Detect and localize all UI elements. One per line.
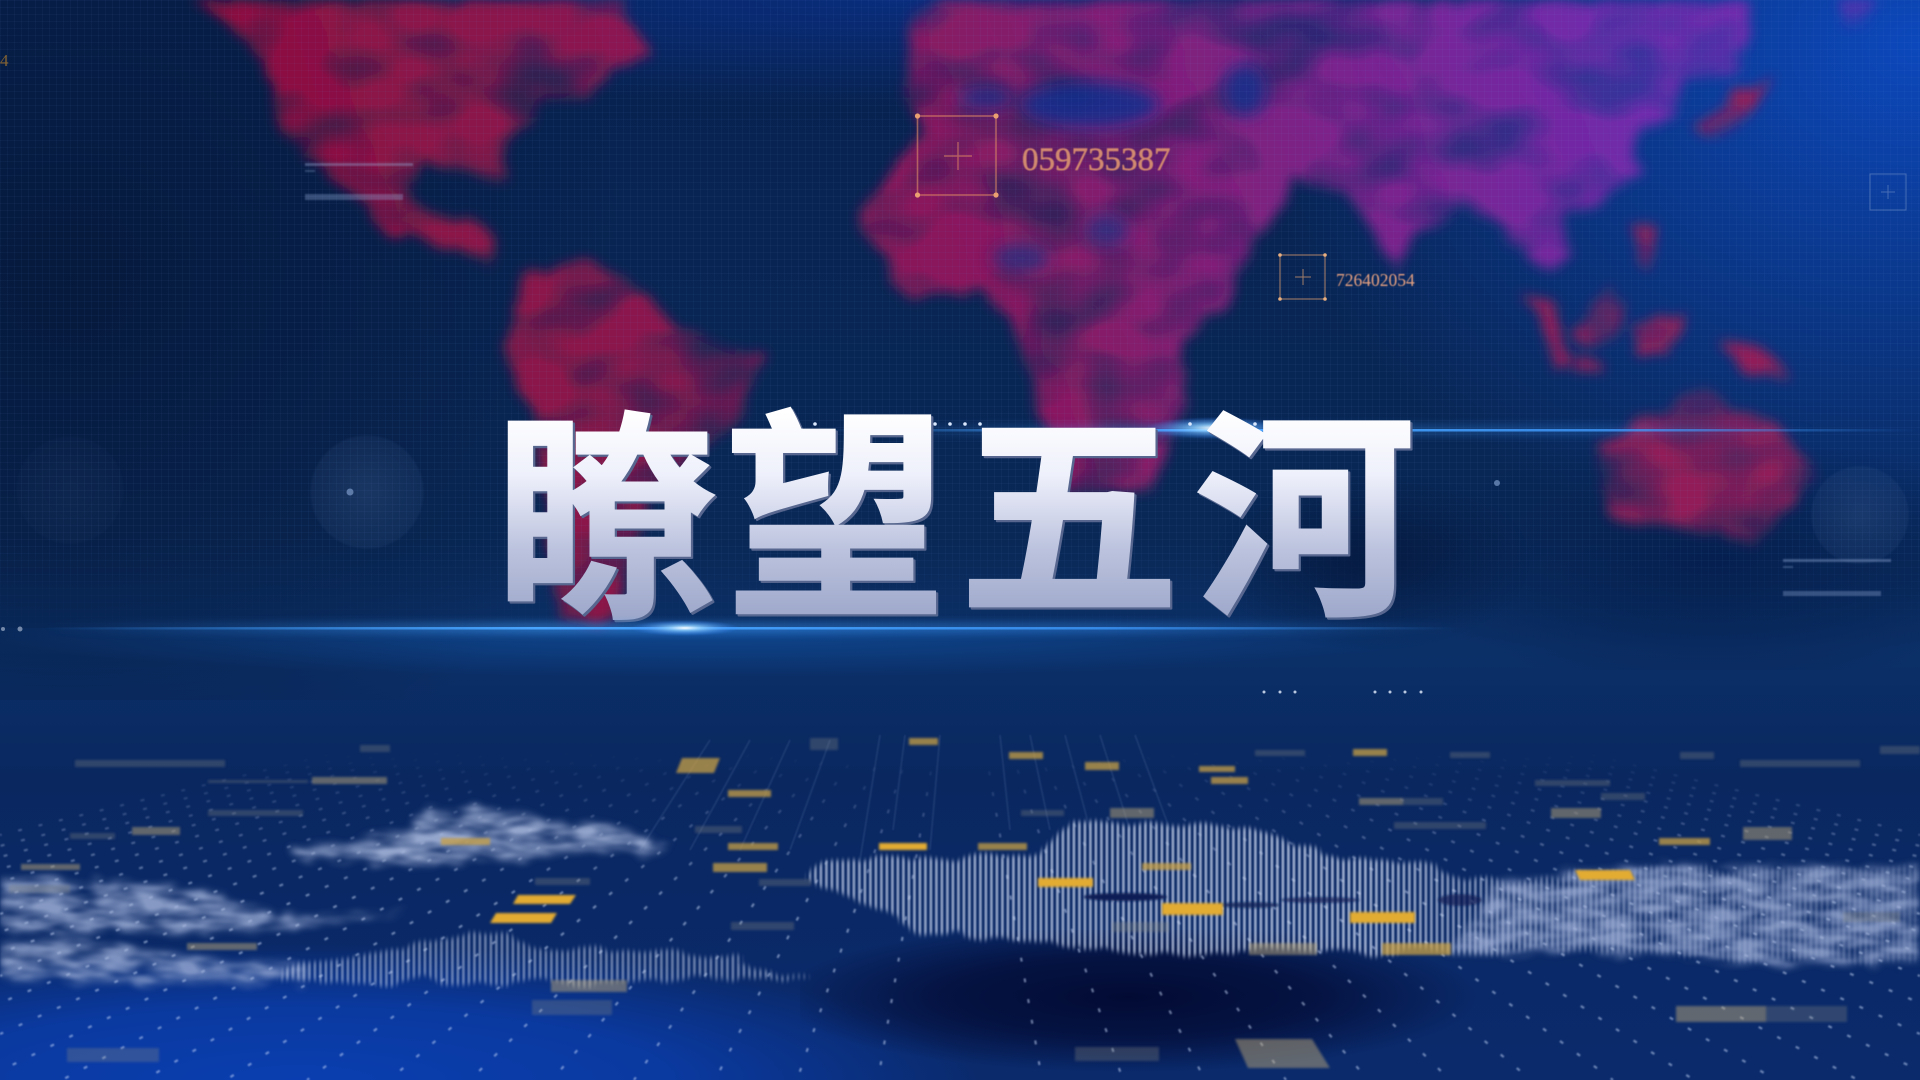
- white dots row: [1, 626, 1422, 694]
- map fragment: middle left: [0, 880, 404, 933]
- title face: 河: [1194, 339, 1416, 661]
- title extrusion: 河: [1196, 341, 1418, 663]
- decorative orbs: [15, 434, 1910, 565]
- title face: [495, 339, 1416, 663]
- bottom map: left fragments: [0, 807, 830, 990]
- target marker: 726402054: [1278, 253, 1415, 301]
- continent: South America: [508, 261, 765, 620]
- faint dot grid overlay: [0, 0, 1920, 640]
- orange numeral at left edge: 4: [0, 51, 9, 70]
- small data lines: right: [1783, 559, 1891, 596]
- title extrusion: 望: [727, 341, 949, 663]
- title face: 望: [725, 339, 947, 661]
- title extrusion: 五: [960, 341, 1182, 663]
- target marker: 059735387: 059735387: [1022, 142, 1170, 178]
- title face: 五: [958, 339, 1180, 661]
- perspective dotted grid: [0, 766, 1920, 1080]
- continent: islands: [1523, 76, 1792, 378]
- perspective solid guide lines: [640, 735, 1170, 860]
- upper light line with dots: [813, 417, 1920, 439]
- title face: 瞭: [495, 341, 717, 663]
- title extrusion: 瞭: [497, 343, 719, 665]
- continent: Australia: [1596, 389, 1817, 540]
- target marker: 059735387: [915, 113, 1170, 198]
- bottom map: right continent: [804, 817, 1920, 972]
- world map: red dotted continents: [190, 0, 1878, 620]
- lower light line with flare: [40, 620, 1460, 636]
- target marker: 726402054: 726402054: [1336, 270, 1415, 290]
- map fragment: upper left: [288, 807, 673, 863]
- target marker: right edge: [1870, 174, 1906, 210]
- continent: Eurasia and Africa: [863, 0, 1750, 495]
- continent: North America: [190, 0, 649, 268]
- small data lines: top left: [305, 163, 413, 200]
- map fragment: far left: [0, 937, 306, 982]
- title shadow: [1210, 470, 1530, 650]
- title: 瞭望五河: [495, 339, 1418, 665]
- title extrusion: [497, 341, 1418, 665]
- yellow data blocks: [9, 738, 1920, 1068]
- map fragment: lower left stripes: [280, 929, 810, 990]
